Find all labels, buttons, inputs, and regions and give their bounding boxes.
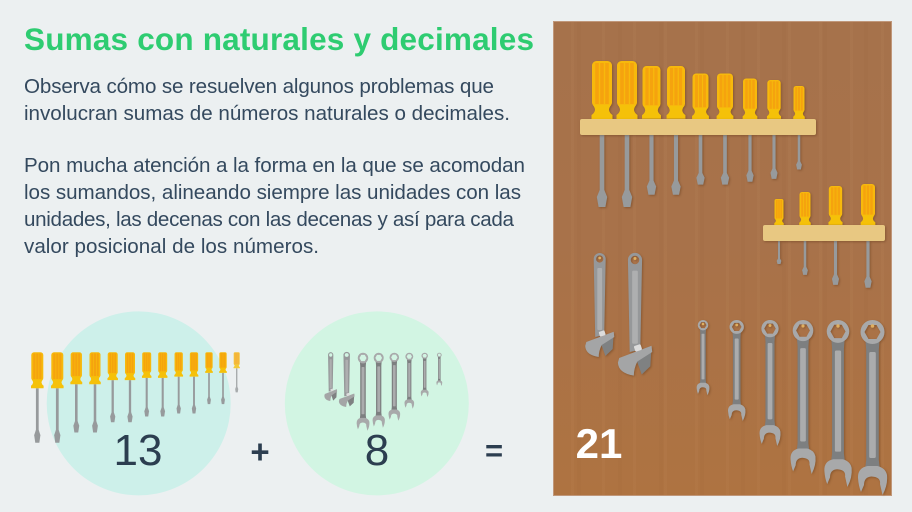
text block: instructions paragraph: Pon mucha atención a la forma en la que se acomodan xyxy=(24,154,525,177)
upper shelf xyxy=(580,119,816,135)
lower shelf xyxy=(763,225,885,241)
circle: 8 wrenches xyxy=(285,311,469,495)
screwdrivers on lower shelf xyxy=(774,184,875,288)
combination wrenches on board xyxy=(697,320,887,495)
plus sign: + xyxy=(250,433,270,470)
text block: instructions paragraph: valor posicional de los números. xyxy=(24,235,319,258)
text block: intro paragraph xyxy=(24,75,510,125)
text block: instructions paragraph: los sumandos, alineando siempre las unidades con las xyxy=(24,181,521,204)
icon: row of 8 wrenches xyxy=(324,352,442,431)
text block: intro paragraph: involucran sumas de números naturales o decimales. xyxy=(24,102,510,125)
text block: instructions paragraph xyxy=(24,154,525,258)
circle: 13 screwdrivers xyxy=(31,311,240,495)
total number 21: 21 xyxy=(576,420,622,467)
title: Sumas con naturales y decimales xyxy=(24,21,534,57)
icon: row of 13 screwdrivers xyxy=(31,352,240,443)
equals sign: = xyxy=(485,433,503,468)
text block: intro paragraph: Observa cómo se resuelven algunos problemas que xyxy=(24,75,494,98)
panel: wooden tool board background xyxy=(553,21,892,496)
adjustable wrenches on board xyxy=(585,253,652,376)
text block: instructions paragraph: unidades, las decenas con las decenas y así para cada xyxy=(24,208,515,231)
number 8: 8 xyxy=(365,426,389,475)
number 13: 13 xyxy=(114,426,162,475)
screwdrivers on upper shelf xyxy=(592,61,805,207)
